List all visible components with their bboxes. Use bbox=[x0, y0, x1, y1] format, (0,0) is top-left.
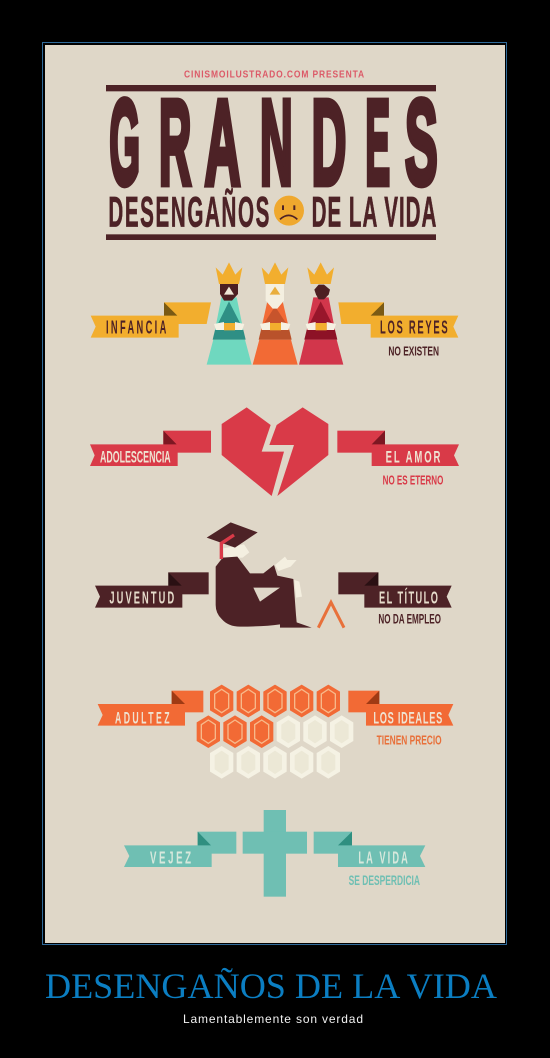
gown bbox=[216, 557, 312, 628]
row 2: adolescencia bbox=[90, 407, 459, 496]
right ribbon: la vida bbox=[314, 832, 425, 867]
gap under arm bbox=[253, 588, 280, 602]
king two bbox=[253, 262, 298, 365]
right ribbon: el titulo: EL TÍTULO bbox=[379, 587, 439, 607]
poster panel bbox=[45, 45, 505, 943]
left ribbon: infancia bbox=[91, 302, 211, 338]
right ribbon: los ideales: LOS IDEALES bbox=[373, 708, 443, 727]
title: GRANDES: E bbox=[365, 75, 390, 210]
caption heading: DESENGAÑOS DE LA VIDA bbox=[45, 966, 497, 1006]
right ribbon: la vida: LA VIDA bbox=[358, 847, 410, 867]
illustration: broken heart bbox=[222, 407, 328, 496]
row 3: juventud bbox=[95, 572, 452, 626]
title: GRANDES: N bbox=[260, 75, 293, 210]
mortarboard bbox=[207, 522, 258, 548]
right ribbon: los reyes bbox=[338, 302, 458, 338]
title: GRANDES: D bbox=[312, 75, 346, 210]
face bbox=[223, 544, 249, 558]
illustration: cross bbox=[243, 810, 307, 897]
illustration: seated graduate bbox=[207, 522, 344, 628]
title: GRANDES: A bbox=[205, 75, 241, 210]
honeycomb: pale cells bbox=[210, 715, 353, 779]
illustration: three kings bbox=[207, 262, 343, 365]
king one bbox=[207, 262, 252, 365]
right ribbon: el amor: EL AMOR bbox=[386, 447, 442, 466]
row 5: vejez bbox=[124, 810, 425, 897]
presenter line: CINISMOILUSTRADO.COM PRESENTA bbox=[184, 69, 365, 80]
caption: no es eterno: NO ES ETERNO bbox=[383, 472, 443, 487]
left ribbon: adolescencia: ADOLESCENCIA bbox=[100, 447, 171, 466]
poster frame bbox=[42, 42, 506, 944]
row 4: adultez bbox=[98, 685, 453, 779]
caption: no existen: NO EXISTEN bbox=[388, 344, 439, 359]
left ribbon: infancia: INFANCIA bbox=[106, 316, 169, 337]
left ribbon: juventud: JUVENTUD bbox=[109, 587, 176, 607]
title: GRANDES: G bbox=[109, 75, 140, 210]
right ribbon: los ideales bbox=[348, 691, 453, 727]
text: S bbox=[405, 75, 438, 210]
top rule bbox=[106, 85, 436, 91]
icon: sad face bbox=[274, 196, 304, 226]
bottom rule bbox=[106, 234, 436, 240]
left ribbon: vejez: VEJEZ bbox=[150, 847, 194, 867]
title: GRANDES bbox=[109, 75, 438, 210]
right ribbon: el amor bbox=[337, 431, 459, 466]
tassel bbox=[221, 535, 234, 559]
king three bbox=[299, 262, 343, 365]
honeycomb: pale cell centres bbox=[215, 720, 349, 774]
left ribbon: adultez: ADULTEZ bbox=[115, 708, 172, 727]
upper hand bbox=[275, 557, 297, 571]
title: GRANDES: R bbox=[159, 75, 191, 210]
caption: tienen precio: TIENEN PRECIO bbox=[377, 732, 442, 747]
caption: se desperdicia: SE DESPERDICIA bbox=[349, 872, 420, 888]
lower hand bbox=[294, 580, 302, 598]
right ribbon: el titulo bbox=[338, 572, 452, 608]
icon: orange caret bbox=[318, 602, 344, 628]
left ribbon: adultez bbox=[98, 691, 203, 727]
left ribbon: juventud bbox=[95, 572, 209, 608]
caption subtext: Lamentablemente son verdad bbox=[183, 1012, 363, 1026]
caption: no da empleo: NO DA EMPLEO bbox=[378, 610, 441, 626]
right ribbon: los reyes: LOS REYES bbox=[380, 316, 449, 337]
honeycomb: orange cell outlines bbox=[201, 689, 335, 743]
header block: DESENGAÑOS bbox=[108, 189, 271, 237]
header block bbox=[106, 69, 438, 240]
left ribbon: adolescencia bbox=[90, 431, 211, 466]
left ribbon: vejez bbox=[124, 832, 236, 867]
honeycomb: orange cells bbox=[197, 685, 340, 748]
row 1: infancia bbox=[91, 302, 458, 359]
